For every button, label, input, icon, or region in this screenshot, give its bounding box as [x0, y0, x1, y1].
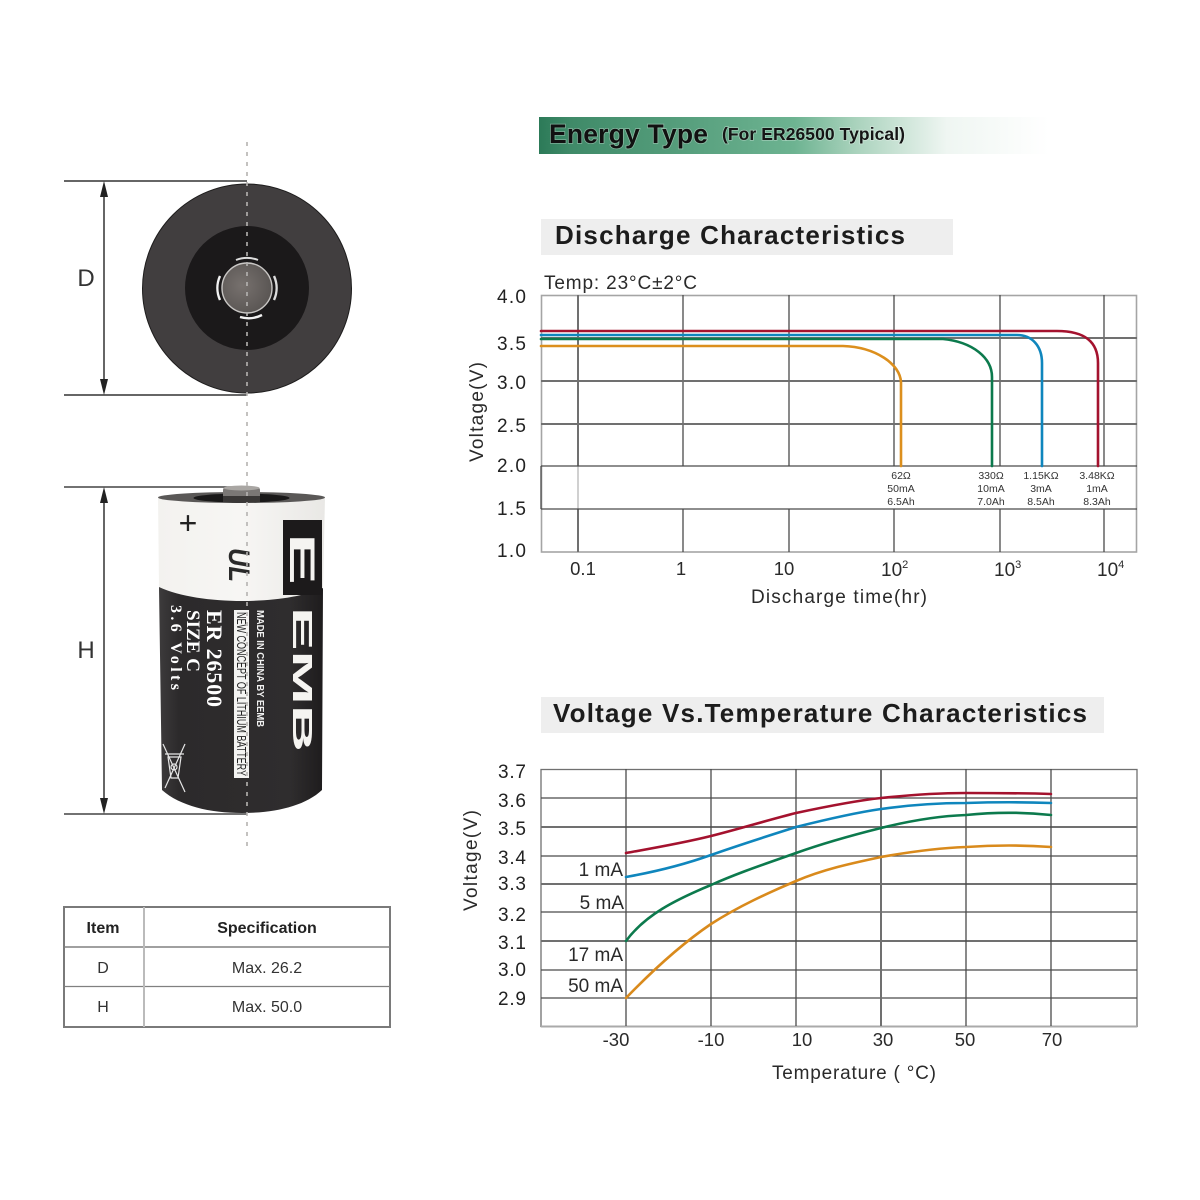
x axis ticks: 50: [955, 1029, 975, 1050]
curve: 1 mA: [626, 793, 1051, 853]
slogan strip: [234, 610, 249, 778]
curve labels: 50 mA: [568, 976, 623, 997]
curve: 50 mA: [541, 346, 901, 466]
x axis ticks: 10: [792, 1029, 812, 1050]
y axis ticks: 2.9: [498, 989, 526, 1010]
curve annotations: 3.48KΩ: [1079, 470, 1115, 482]
y axis ticks: 3.6: [498, 791, 526, 812]
y axis ticks: 3.0: [498, 960, 526, 981]
logo text: EMB: [287, 607, 318, 752]
dimension diagram: diameter D: D: [77, 265, 95, 292]
curve annotations: 6.5Ah: [887, 496, 915, 508]
chart: discharge characteristics: [467, 287, 1137, 608]
logo block: [282, 520, 322, 595]
y axis ticks: 1.5: [497, 499, 526, 520]
center axis dashed line: [246, 142, 248, 848]
y axis title: Voltage(V): [461, 810, 482, 911]
y axis ticks: 4.0: [497, 287, 526, 308]
curve: 5 mA: [626, 802, 1051, 877]
icon: crossed-out bin: [163, 744, 185, 792]
curve annotations: 1.15KΩ: [1023, 470, 1059, 482]
table row D: [97, 960, 302, 977]
y axis ticks: [497, 287, 526, 562]
specification table: [64, 907, 390, 1027]
y axis ticks: 3.4: [498, 848, 526, 869]
heading: Discharge Characteristics: Discharge Characteristics: [555, 220, 905, 250]
table header: Item: [87, 920, 119, 937]
curve labels: 17 mA: [568, 945, 623, 966]
dimension diagram: diameter D: [64, 181, 247, 395]
y axis ticks: 3.5: [497, 334, 526, 355]
curve annotations: 7.0Ah: [977, 496, 1005, 508]
curve: 17 mA: [626, 813, 1051, 941]
curve: 1 mA: [541, 331, 1098, 466]
x axis ticks: 30: [873, 1029, 893, 1050]
x axis ticks: 70: [1042, 1029, 1062, 1050]
heading: Voltage Vs. Temperature Characteristics: Voltage Vs.Temperature Characteristics: [553, 698, 1087, 728]
table row D: Max. 26.2: [232, 960, 302, 977]
y axis ticks: 3.5: [498, 819, 526, 840]
table row D: D: [97, 960, 109, 977]
x axis ticks: 4: [1118, 559, 1124, 571]
curve annotations: 62Ω: [891, 470, 911, 482]
curve annotations: 3mA: [1030, 483, 1052, 495]
table header: [87, 920, 317, 937]
x axis ticks: 1: [676, 558, 686, 579]
table row H: Max. 50.0: [232, 999, 302, 1016]
x axis title: Discharge time(hr): [751, 587, 927, 608]
x axis title: Temperature ( °C): [772, 1063, 936, 1084]
curve annotations: 8.3Ah: [1083, 496, 1111, 508]
x axis ticks: 10: [774, 558, 794, 579]
banner: Energy Type: (For ER26500 Typical): [722, 124, 905, 144]
y axis ticks: 3.3: [498, 874, 526, 895]
banner: Energy Type: Energy Type: [549, 119, 708, 149]
x axis ticks: 10: [1097, 560, 1118, 581]
y axis ticks: 3.0: [497, 373, 526, 394]
logo block: E: [282, 533, 321, 585]
origin text: MADE IN CHINA BY EEMB: [254, 610, 265, 727]
battery top cap: [158, 486, 325, 503]
curve: 3 mA: [541, 335, 1042, 466]
y axis ticks: [498, 762, 526, 1010]
plus sign: +: [179, 505, 197, 541]
table row H: [97, 999, 302, 1016]
curve annotations: 330Ω: [978, 470, 1004, 482]
y axis ticks: 3.7: [498, 762, 526, 783]
curve annotations: 1mA: [1086, 483, 1108, 495]
x axis ticks: 10: [994, 560, 1015, 581]
x axis ticks: [603, 1029, 1062, 1050]
x axis ticks: [570, 558, 1124, 581]
y axis ticks: 1.0: [497, 541, 526, 562]
size text: SIZE C: [182, 610, 203, 672]
UL mark: UL: [222, 548, 255, 582]
x axis ticks: 0.1: [570, 558, 596, 579]
voltage text: 3.6 Volts: [167, 605, 184, 690]
chart: voltage vs temperature: [461, 762, 1137, 1084]
curve annotations: [887, 470, 1115, 508]
icon: battery top view: [142, 184, 352, 393]
curve labels: [568, 860, 624, 997]
curve: 10 mA: [541, 339, 992, 466]
table header: Specification: [217, 920, 317, 937]
x axis ticks: 10: [881, 560, 902, 581]
curve annotations: 10mA: [977, 483, 1005, 495]
battery dark sleeve: [159, 587, 323, 813]
x axis ticks: -30: [603, 1029, 629, 1050]
y axis title: Voltage(V): [467, 362, 488, 462]
y axis ticks: 2.0: [497, 456, 526, 477]
slogan strip: NEW CONCEPT OF LITHIUM BATTERY: [234, 612, 249, 776]
curve labels: 1 mA: [579, 860, 623, 881]
curve labels: 5 mA: [580, 893, 624, 914]
banner: Energy Type: [539, 117, 1049, 154]
dimension diagram: height H: H: [77, 637, 95, 664]
y axis ticks: 3.2: [498, 905, 526, 926]
battery white sleeve: [158, 497, 325, 601]
curve: 50 mA: [626, 846, 1051, 998]
x axis ticks: 2: [902, 559, 908, 571]
x axis ticks: -10: [698, 1029, 724, 1050]
y axis ticks: 3.1: [498, 933, 526, 954]
icon: battery side view: [158, 486, 325, 813]
x axis ticks: 3: [1015, 559, 1021, 571]
temperature note: Temp: 23°C±2°C: [544, 273, 697, 294]
table row H: H: [97, 999, 109, 1016]
model text: ER 26500: [202, 610, 227, 707]
curve annotations: 8.5Ah: [1027, 496, 1055, 508]
dimension diagram: height H: [64, 487, 247, 814]
y axis ticks: 2.5: [497, 416, 526, 437]
curve annotations: 50mA: [887, 483, 915, 495]
